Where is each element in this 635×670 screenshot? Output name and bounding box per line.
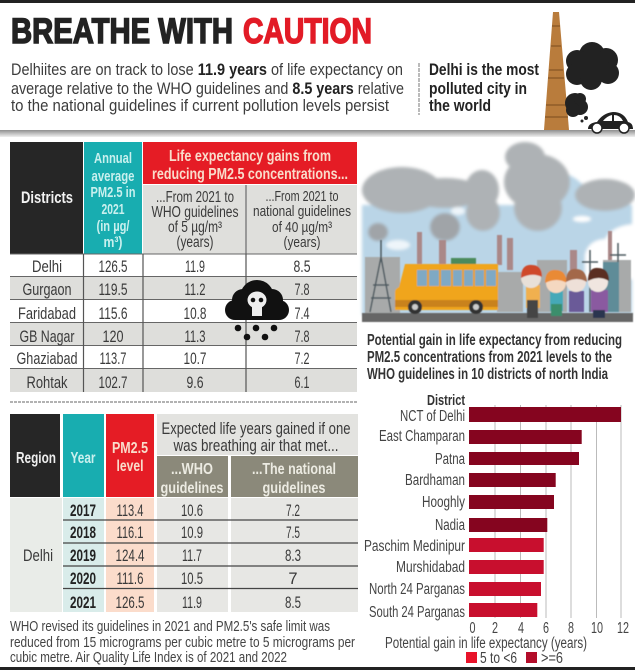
rows: district values: 113.7 (100, 350, 126, 368)
rows: yearly values: 111.6 (116, 570, 144, 588)
rows: yearly values: 7 (288, 570, 298, 588)
district labels: NCT of Delhi (400, 408, 465, 425)
rows: yearly values: 126.5 (116, 594, 144, 612)
rows: district values: 119.5 (98, 281, 128, 299)
footnote: reduced from 15 micrograms per cubic metre to 5 micrograms per (10, 634, 355, 651)
title: CAUTION (243, 12, 372, 51)
header: year: Year (70, 450, 96, 467)
district labels: Paschim Medinipur (364, 538, 465, 555)
rows: yearly values: 7.5 (286, 524, 300, 542)
header: annual average PM2.5: (in µg/ (96, 218, 130, 235)
header: annual average PM2.5: 2021 (102, 201, 124, 218)
legend: >=6 (541, 650, 563, 667)
rows: district values: 115.6 (98, 305, 128, 323)
callout: most polluted city: the world (429, 96, 491, 115)
header: region: Region (16, 450, 56, 467)
rows: yearly values: 10.6 (181, 502, 203, 520)
subheader: WHO guidelines: ...WHO (171, 461, 213, 478)
rows: district values: Faridabad (18, 305, 76, 323)
district labels: East Champaran (379, 428, 465, 445)
rows: yearly values: 10.9 (181, 524, 203, 542)
header: expected life years: Expected life years gained if one (162, 419, 350, 438)
legend: 5 to <6 (480, 650, 517, 667)
rows: district values: 7.8 (294, 328, 310, 346)
district labels: Murshidabad (396, 559, 465, 576)
footnote: WHO revised its guidelines in 2021 and PM2.5's safe limit was (10, 618, 330, 635)
header: annual average PM2.5 (84, 142, 142, 254)
rows: district values: 11.2 (184, 281, 206, 299)
intro text: Delhiites are on track to lose 11.9 years of life expectancy on (11, 60, 403, 79)
subheader: national guidelines (247, 185, 357, 254)
subheader: WHO guidelines: of 5 µg/m³ (168, 219, 222, 236)
rows: yearly values: 8.3 (285, 547, 301, 565)
district labels (364, 408, 465, 621)
rows: district values: Rohtak (26, 374, 68, 392)
subheader: national guidelines (231, 456, 358, 497)
axis ticks: 8 (568, 620, 574, 637)
rows: district values: 11.9 (185, 258, 205, 276)
subheader: national guidelines: (years) (284, 234, 321, 251)
subheader: WHO guidelines: ...From 2021 to (156, 189, 234, 206)
rows: yearly values: 11.9 (182, 594, 202, 612)
subheader: WHO guidelines: WHO guidelines (152, 204, 239, 221)
header: PM2.5 level: PM2.5 (112, 440, 148, 457)
header: life expectancy gains: reducing PM2.5 concentrations... (152, 166, 348, 183)
subheader: WHO guidelines (143, 185, 245, 254)
rows: district values: GB Nagar (20, 328, 75, 346)
row backgrounds (10, 498, 358, 612)
callout: most polluted city: Delhi is the most (429, 60, 539, 79)
rows: district values (16, 258, 310, 392)
rows: district values: 6.1 (294, 374, 310, 392)
header: life expectancy gains (143, 142, 357, 184)
table: districts (10, 142, 357, 392)
rows: yearly values (23, 502, 301, 612)
rows: yearly values: 11.7 (182, 547, 202, 565)
header: annual average PM2.5: Annual (94, 150, 132, 167)
subheader: WHO guidelines: guidelines (160, 480, 224, 497)
subheader: national guidelines: of 40 µg/m³ (272, 219, 332, 236)
rows: yearly values: 2020 (70, 570, 96, 588)
callout: most polluted city: polluted city in (429, 79, 527, 98)
subheader: WHO guidelines (157, 456, 228, 497)
axis ticks: 2 (492, 620, 498, 637)
district labels: North 24 Parganas (369, 581, 465, 598)
footnote (10, 618, 355, 666)
icon: skull cloud (225, 280, 289, 340)
rows: district values: 9.6 (186, 374, 204, 392)
district labels: Hooghly (422, 494, 465, 511)
subheader: national guidelines: national guidelines (253, 203, 351, 220)
rows: yearly values: 116.1 (116, 524, 144, 542)
rows: yearly values: 113.4 (116, 502, 144, 520)
header: districts: Districts (21, 189, 73, 207)
rows: yearly values: 2017 (70, 502, 96, 520)
axis ticks (470, 620, 629, 637)
icon: minar with smoke and car (544, 12, 633, 133)
header: PM2.5 level: level (116, 458, 144, 475)
rows: district values: 120 (102, 328, 124, 346)
axis ticks: 6 (543, 620, 549, 637)
callout: most polluted city (429, 60, 539, 115)
rows: yearly values: 2019 (70, 547, 96, 565)
rows: district values: 10.7 (184, 350, 206, 368)
header: annual average PM2.5: m³) (104, 234, 123, 251)
rows: district values: 102.7 (98, 374, 128, 392)
axis ticks: 12 (617, 620, 629, 637)
title: BREATHE WITH (11, 12, 233, 51)
rows: district values: 11.3 (184, 328, 206, 346)
rows: district values: 8.5 (294, 258, 310, 276)
header: PM2.5 level (106, 414, 154, 497)
intro text (11, 60, 404, 115)
bar chart: potential gain (364, 392, 629, 667)
rows: yearly values: Delhi (23, 547, 53, 565)
rows: district values: 7.4 (294, 305, 310, 323)
footnote: cubic metre. Air Quality Life Index is of 2021 and 2022 (10, 649, 287, 666)
header: expected life years (157, 414, 358, 455)
rows: district values: Ghaziabad (16, 350, 78, 368)
axis ticks: 0 (470, 620, 476, 637)
rows: district values: 7.8 (294, 281, 310, 299)
district labels: Nadia (435, 517, 465, 534)
rows: yearly values: 2018 (70, 524, 96, 542)
header: region (10, 414, 60, 497)
rows: yearly values: 8.5 (285, 594, 301, 612)
district labels: Patna (435, 451, 465, 468)
subheader: WHO guidelines: (years) (176, 234, 214, 251)
header: districts (10, 142, 83, 254)
header: annual average PM2.5: PM2.5 in (90, 184, 136, 201)
rows: district values: Gurgaon (22, 281, 72, 299)
rows: district values: 126.5 (98, 258, 128, 276)
bars (469, 407, 621, 617)
district labels: Bardhaman (405, 472, 465, 489)
illustration: polluted city with school bus and children (362, 142, 635, 322)
header: expected life years: was breathing air that met... (173, 436, 338, 455)
subheader: national guidelines: guidelines (262, 480, 326, 497)
rows: yearly values: 2021 (70, 594, 96, 612)
chart title (367, 332, 622, 383)
rows: yearly values: 124.4 (116, 547, 144, 565)
intro text: to the national guidelines if current pollution levels persist (11, 96, 389, 115)
rows: district values: Delhi (32, 258, 62, 276)
intro text: average relative to the WHO guidelines and 8.5 years relative (11, 79, 404, 98)
rows: district values: 7.2 (294, 350, 310, 368)
subheader: national guidelines: ...The national (252, 461, 336, 478)
district labels: South 24 Parganas (369, 604, 465, 621)
header: year (63, 414, 104, 497)
rows: yearly values: 7.2 (286, 502, 300, 520)
subheader: national guidelines: ...From 2021 to (266, 188, 338, 205)
row stripes (10, 277, 357, 392)
legend (466, 650, 563, 667)
header: annual average PM2.5: average (92, 168, 134, 185)
header: life expectancy gains: Life expectancy gains from (169, 148, 331, 165)
rows: yearly values: 10.5 (181, 570, 203, 588)
axis ticks: 10 (591, 620, 603, 637)
rows: district values: 10.8 (184, 305, 206, 323)
axis ticks: 4 (518, 620, 524, 637)
table: Delhi by year (10, 414, 358, 612)
bar chart: potential gain: District (427, 392, 465, 409)
